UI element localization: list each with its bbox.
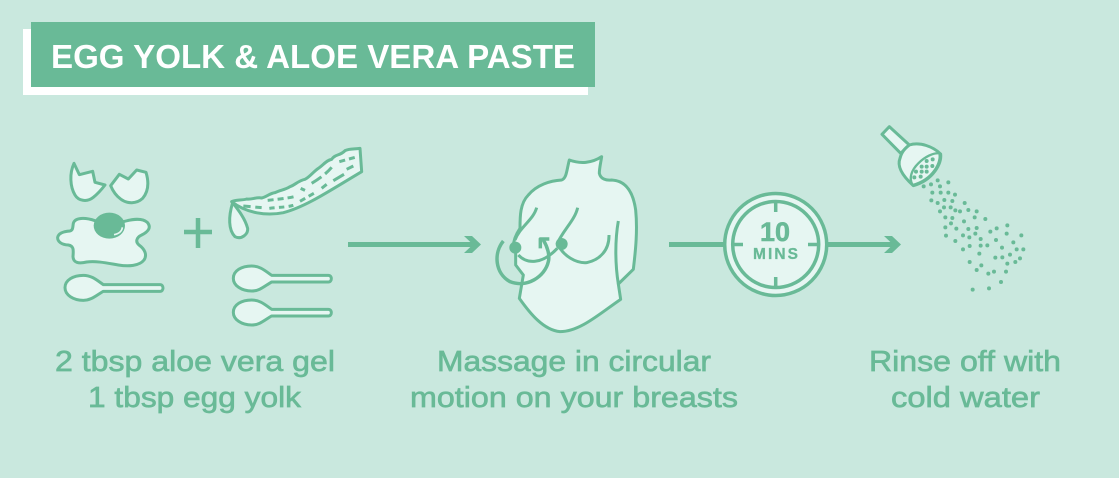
timer unit: MINS <box>753 246 798 263</box>
nipples <box>509 238 568 254</box>
icon: right egg shell <box>111 170 148 203</box>
breast and arm lines <box>515 208 618 284</box>
icon: aloe leaf <box>232 148 362 214</box>
icon: left egg shell <box>71 163 105 200</box>
shower nozzles <box>912 157 935 179</box>
icon: tablespoon <box>65 275 163 300</box>
title: EGG YOLK & ALOE VERA PASTE <box>51 38 575 75</box>
water spray <box>922 178 1025 292</box>
text: ingredients: 1 tbsp egg yolk <box>88 382 302 414</box>
text: ingredients <box>55 346 335 414</box>
icon: cracked egg and one spoon <box>58 163 163 300</box>
text: ingredients: 2 tbsp aloe vera gel <box>55 346 335 378</box>
torso outline <box>513 157 636 332</box>
title banner <box>23 22 595 95</box>
circular arrow <box>497 239 549 284</box>
timer value: 10 <box>760 217 790 247</box>
timer with connecting arrow <box>669 194 901 296</box>
text: massage instruction <box>410 346 738 414</box>
arrow: ingredients to massage <box>348 236 481 253</box>
icon: torso with circular massage arrows <box>497 157 636 332</box>
shower handle <box>882 127 909 153</box>
shower face <box>911 153 940 185</box>
icon: egg white <box>58 218 149 266</box>
icon: tablespoon <box>233 300 331 325</box>
icon: plus sign <box>184 218 212 248</box>
icon: shower head with water drops <box>882 127 1025 292</box>
text: rinse instruction: Rinse off with <box>869 346 1061 378</box>
icon: aloe vera leaf and two spoons <box>230 148 362 325</box>
icon: egg yolk <box>94 213 125 239</box>
text: massage instruction: Massage in circular <box>437 346 711 378</box>
text: massage instruction: motion on your breasts <box>410 382 738 414</box>
timer dial <box>725 194 827 296</box>
text: rinse instruction: cold water <box>891 382 1040 414</box>
arrow: massage to rinse <box>669 236 901 253</box>
icon: tablespoon <box>233 266 331 291</box>
icon: aloe drop <box>230 203 248 238</box>
text: rinse instruction <box>869 346 1061 414</box>
shower dome <box>899 144 941 186</box>
icon: aloe gel dashes <box>243 157 355 208</box>
